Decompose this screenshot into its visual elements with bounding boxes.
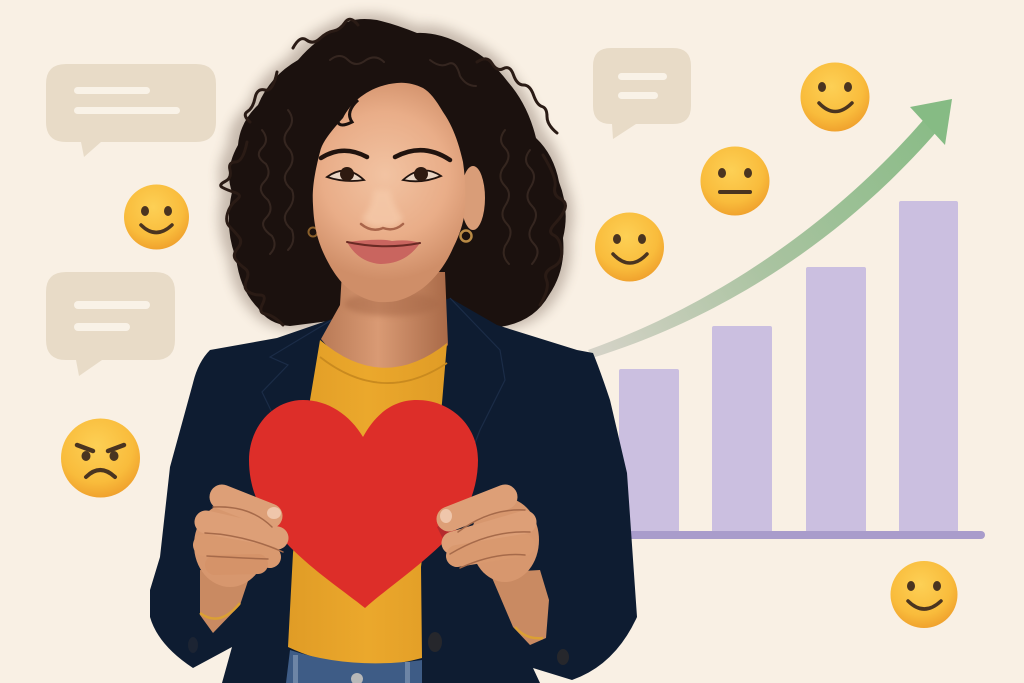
- speech bubble: middle left: [46, 272, 175, 376]
- heart: [249, 400, 478, 608]
- arrow: rising trend: [588, 99, 952, 358]
- bar chart: [619, 201, 985, 539]
- person: [150, 14, 637, 683]
- emoji: angry: [61, 418, 140, 498]
- blazer lapel lines: [262, 298, 505, 520]
- jeans: [286, 650, 422, 683]
- buttons: [188, 632, 569, 665]
- earrings: [308, 228, 472, 242]
- blazer: [150, 298, 637, 683]
- eyebrows: [321, 150, 450, 160]
- hair: [219, 14, 573, 330]
- mouth: [347, 240, 420, 264]
- nose: [361, 190, 403, 230]
- emoji: smile bottom right: [890, 561, 958, 628]
- neck: [321, 272, 448, 379]
- face: [313, 83, 465, 302]
- eyes: [327, 167, 441, 181]
- emoji: smile left: [124, 184, 189, 250]
- emoji: smile top right: [800, 62, 870, 132]
- forehead curl: [338, 100, 358, 125]
- hand: right: [437, 497, 549, 645]
- emoji: neutral: [700, 146, 770, 216]
- right ear: [461, 166, 485, 230]
- speech bubble: top left: [46, 64, 216, 157]
- hand: left: [194, 497, 283, 633]
- shirt collar rib: [320, 357, 447, 383]
- speech bubble: top centre: [593, 48, 691, 139]
- shirt: [288, 340, 447, 666]
- chin shadow: [344, 292, 440, 316]
- emoji: smile centre: [595, 212, 664, 282]
